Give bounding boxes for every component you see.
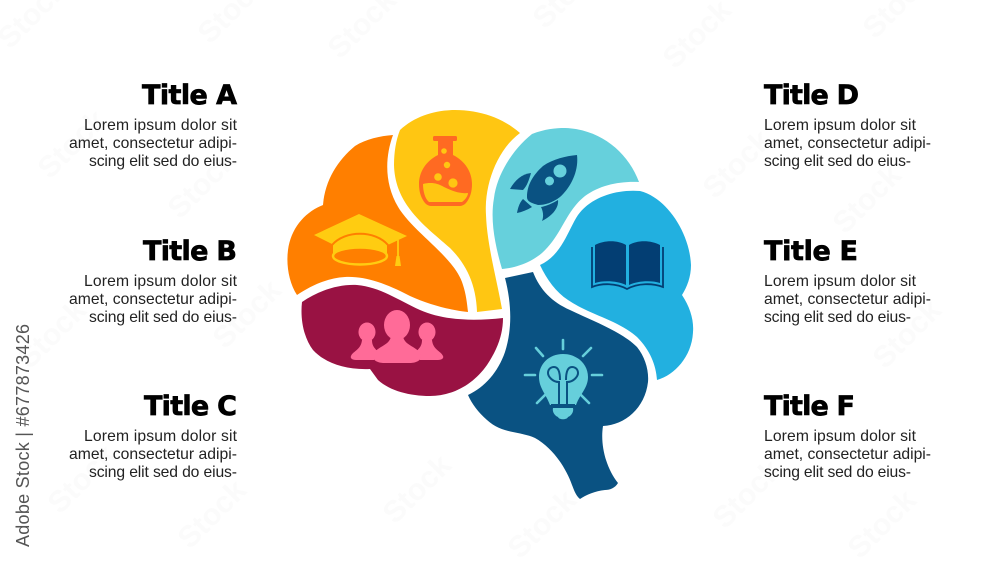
icon: rocket: [510, 155, 577, 221]
text block: Title B: scing elit sed do eius-: [89, 309, 237, 326]
text block: Title A: [69, 80, 238, 170]
text block: Title B: [69, 236, 238, 326]
text block: Title F: Title F: [764, 391, 855, 422]
text block: Title E: Title E: [764, 236, 858, 267]
text block: Title E: Lorem ipsum dolor sit: [764, 273, 917, 290]
text: Stock: [867, 294, 948, 375]
panel: brain segment teal: [493, 128, 639, 269]
panel: brain segment yellow: [394, 110, 520, 312]
text block: Title E: scing elit sed do eius-: [764, 309, 911, 326]
text block: Title E: amet, consectetur adipi-: [764, 291, 931, 308]
text block: Title C: Title C: [144, 391, 237, 422]
icon: graduation cap: [314, 214, 407, 266]
panel: brain segment orange: [287, 135, 468, 312]
text block: Title C: [69, 391, 238, 481]
text block: Title A: Lorem ipsum dolor sit: [84, 117, 238, 134]
text block: Title F: amet, consectetur adipi-: [764, 446, 931, 463]
text block: Title B: Lorem ipsum dolor sit: [84, 273, 238, 290]
text block: Title B: Title B: [143, 236, 237, 267]
text block: Title D: Lorem ipsum dolor sit: [764, 117, 917, 134]
text: Stock: [162, 144, 243, 225]
text block: Title D: scing elit sed do eius-: [764, 153, 911, 170]
text: Stock: [207, 274, 288, 355]
panel: brain segment maroon: [301, 285, 503, 396]
text: Stock: [42, 439, 123, 520]
text block: Title E: [764, 236, 931, 326]
icon: flask: [419, 136, 472, 206]
text: Stock: [172, 474, 253, 555]
icon: open book: [592, 241, 663, 289]
text block: Title F: Lorem ipsum dolor sit: [764, 428, 917, 445]
text block: Title D: Title D: [764, 80, 859, 111]
text: Stock: [12, 294, 93, 375]
icon: people: [351, 310, 443, 363]
text block: Title A: Title A: [142, 80, 237, 111]
text block: Title C: Lorem ipsum dolor sit: [84, 428, 238, 445]
text block: Title F: [764, 391, 931, 481]
text block: Title A: amet, consectetur adipi-: [69, 135, 237, 152]
text block: Title C: scing elit sed do eius-: [89, 464, 237, 481]
text block: Title D: [764, 80, 931, 170]
icon: light bulb: [525, 340, 602, 419]
text: Stock: [697, 124, 778, 205]
text block: Title B: amet, consectetur adipi-: [69, 291, 237, 308]
text: Stock: [377, 449, 458, 530]
text block: Title A: scing elit sed do eius-: [89, 153, 237, 170]
text: Stock: [32, 104, 113, 185]
panel: brain segment blue: [540, 191, 693, 380]
text block: Title D: amet, consectetur adipi-: [764, 135, 931, 152]
text: Stock: [707, 454, 788, 535]
panel: brain segment navy: [468, 272, 648, 499]
text block: Title F: scing elit sed do eius-: [764, 464, 911, 481]
text block: Title C: amet, consectetur adipi-: [69, 446, 237, 463]
text: Stock: [827, 159, 908, 240]
credit: vertical stock id: Adobe Stock | #677873426: [13, 324, 33, 547]
